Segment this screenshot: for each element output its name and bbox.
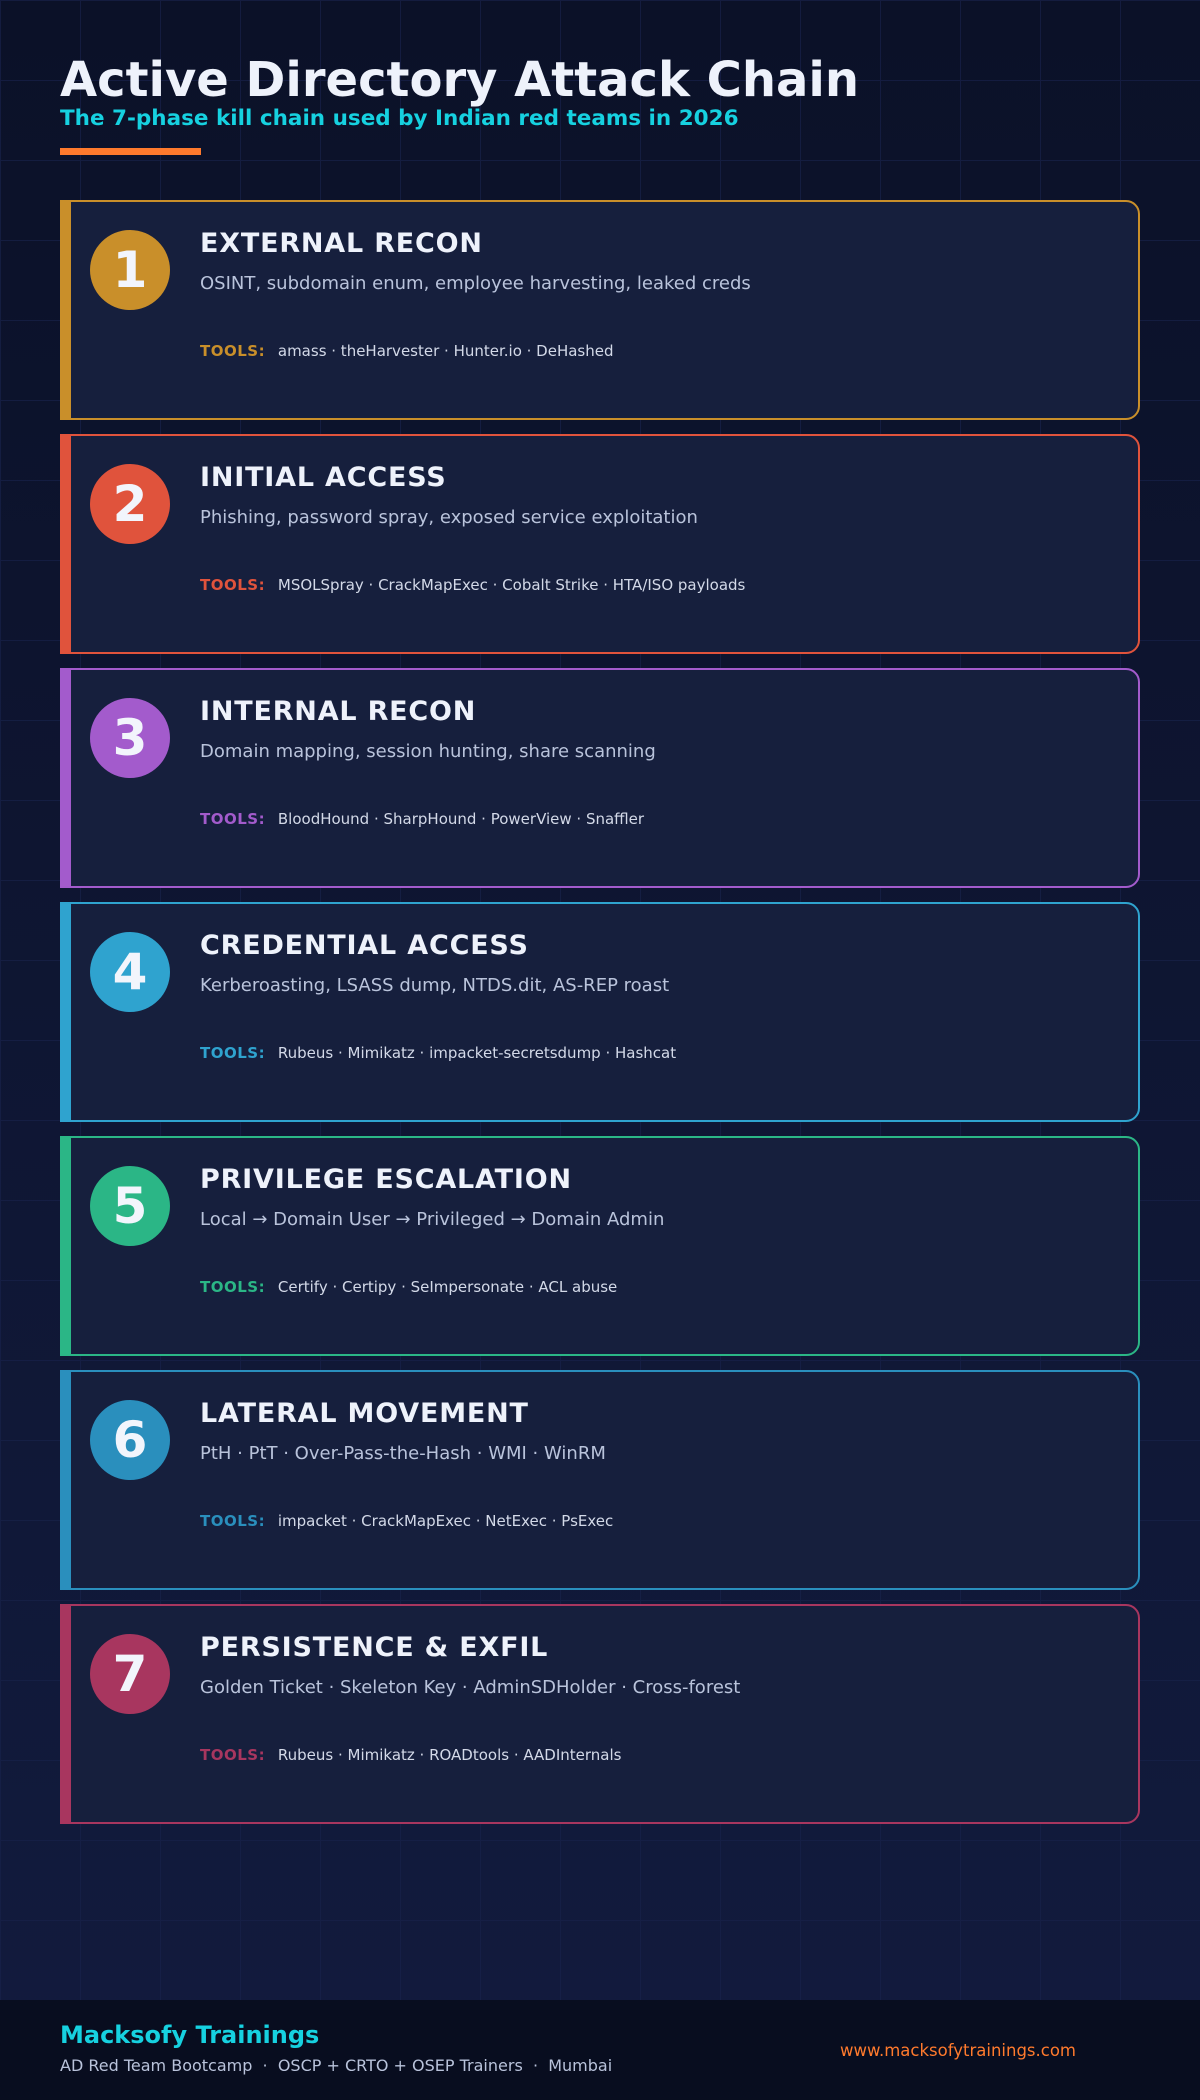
heading: LATERAL MOVEMENT: [200, 1398, 529, 1429]
tools: TOOLS: MSOLSpray · CrackMapExec · Cobalt Strike · HTA/ISO payloads: [200, 576, 745, 594]
tools: TOOLS: BloodHound · SharpHound · PowerView · Snaffler: [200, 810, 644, 828]
description: Phishing, password spray, exposed service exploitation: [200, 507, 698, 528]
description: Local → Domain User → Privileged → Domain Admin: [200, 1209, 664, 1230]
panel: phase 2: [60, 434, 1140, 654]
tools: TOOLS: Rubeus · Mimikatz · ROADtools · AADInternals: [200, 1746, 622, 1764]
icon: number 1: [90, 230, 170, 310]
panel: phase 1: [60, 200, 1140, 420]
footer tagline: AD Red Team Bootcamp · OSCP + CRTO + OSEP Trainers · Mumbai: [60, 2056, 612, 2075]
icon: number 4: 4: [113, 943, 147, 1001]
panel: phase 7: [60, 1604, 1140, 1824]
panel: phase 3: [60, 668, 1140, 888]
heading: PRIVILEGE ESCALATION: [200, 1164, 572, 1195]
accent rule: [60, 148, 201, 155]
icon: number 2: 2: [113, 475, 147, 533]
heading: INITIAL ACCESS: [200, 462, 447, 493]
heading: PERSISTENCE & EXFIL: [200, 1632, 548, 1663]
brand name: Macksofy Trainings: [60, 2021, 319, 2049]
panel: phase 5: [60, 1136, 1140, 1356]
description: OSINT, subdomain enum, employee harvesting, leaked creds: [200, 273, 751, 294]
icon: number 4: [90, 932, 170, 1012]
subtitle: The 7-phase kill chain used by Indian red teams in 2026: [60, 106, 739, 131]
title: Active Directory Attack Chain: [60, 52, 859, 108]
tools: TOOLS: Certify · Certipy · SeImpersonate · ACL abuse: [200, 1278, 617, 1296]
description: Golden Ticket · Skeleton Key · AdminSDHolder · Cross-forest: [200, 1677, 740, 1698]
icon: number 7: [90, 1634, 170, 1714]
panel: phase 4: [60, 902, 1140, 1122]
description: Domain mapping, session hunting, share scanning: [200, 741, 656, 762]
tools: TOOLS: impacket · CrackMapExec · NetExec · PsExec: [200, 1512, 613, 1530]
icon: number 7: 7: [113, 1645, 147, 1703]
tools: TOOLS: amass · theHarvester · Hunter.io · DeHashed: [200, 342, 614, 360]
panel: phase 6: [60, 1370, 1140, 1590]
description: PtH · PtT · Over-Pass-the-Hash · WMI · WinRM: [200, 1443, 606, 1464]
description: Kerberoasting, LSASS dump, NTDS.dit, AS-REP roast: [200, 975, 669, 996]
heading: INTERNAL RECON: [200, 696, 476, 727]
icon: number 1: 1: [113, 241, 147, 299]
icon: number 6: 6: [113, 1411, 147, 1469]
heading: EXTERNAL RECON: [200, 228, 483, 259]
footer: [0, 2000, 1200, 2100]
heading: CREDENTIAL ACCESS: [200, 930, 529, 961]
icon: number 5: [90, 1166, 170, 1246]
website url: www.macksofytrainings.com: [840, 2041, 1076, 2060]
icon: number 2: [90, 464, 170, 544]
icon: number 3: [90, 698, 170, 778]
icon: number 6: [90, 1400, 170, 1480]
icon: number 5: 5: [113, 1177, 147, 1235]
tools: TOOLS: Rubeus · Mimikatz · impacket-secretsdump · Hashcat: [200, 1044, 676, 1062]
icon: number 3: 3: [113, 709, 147, 767]
